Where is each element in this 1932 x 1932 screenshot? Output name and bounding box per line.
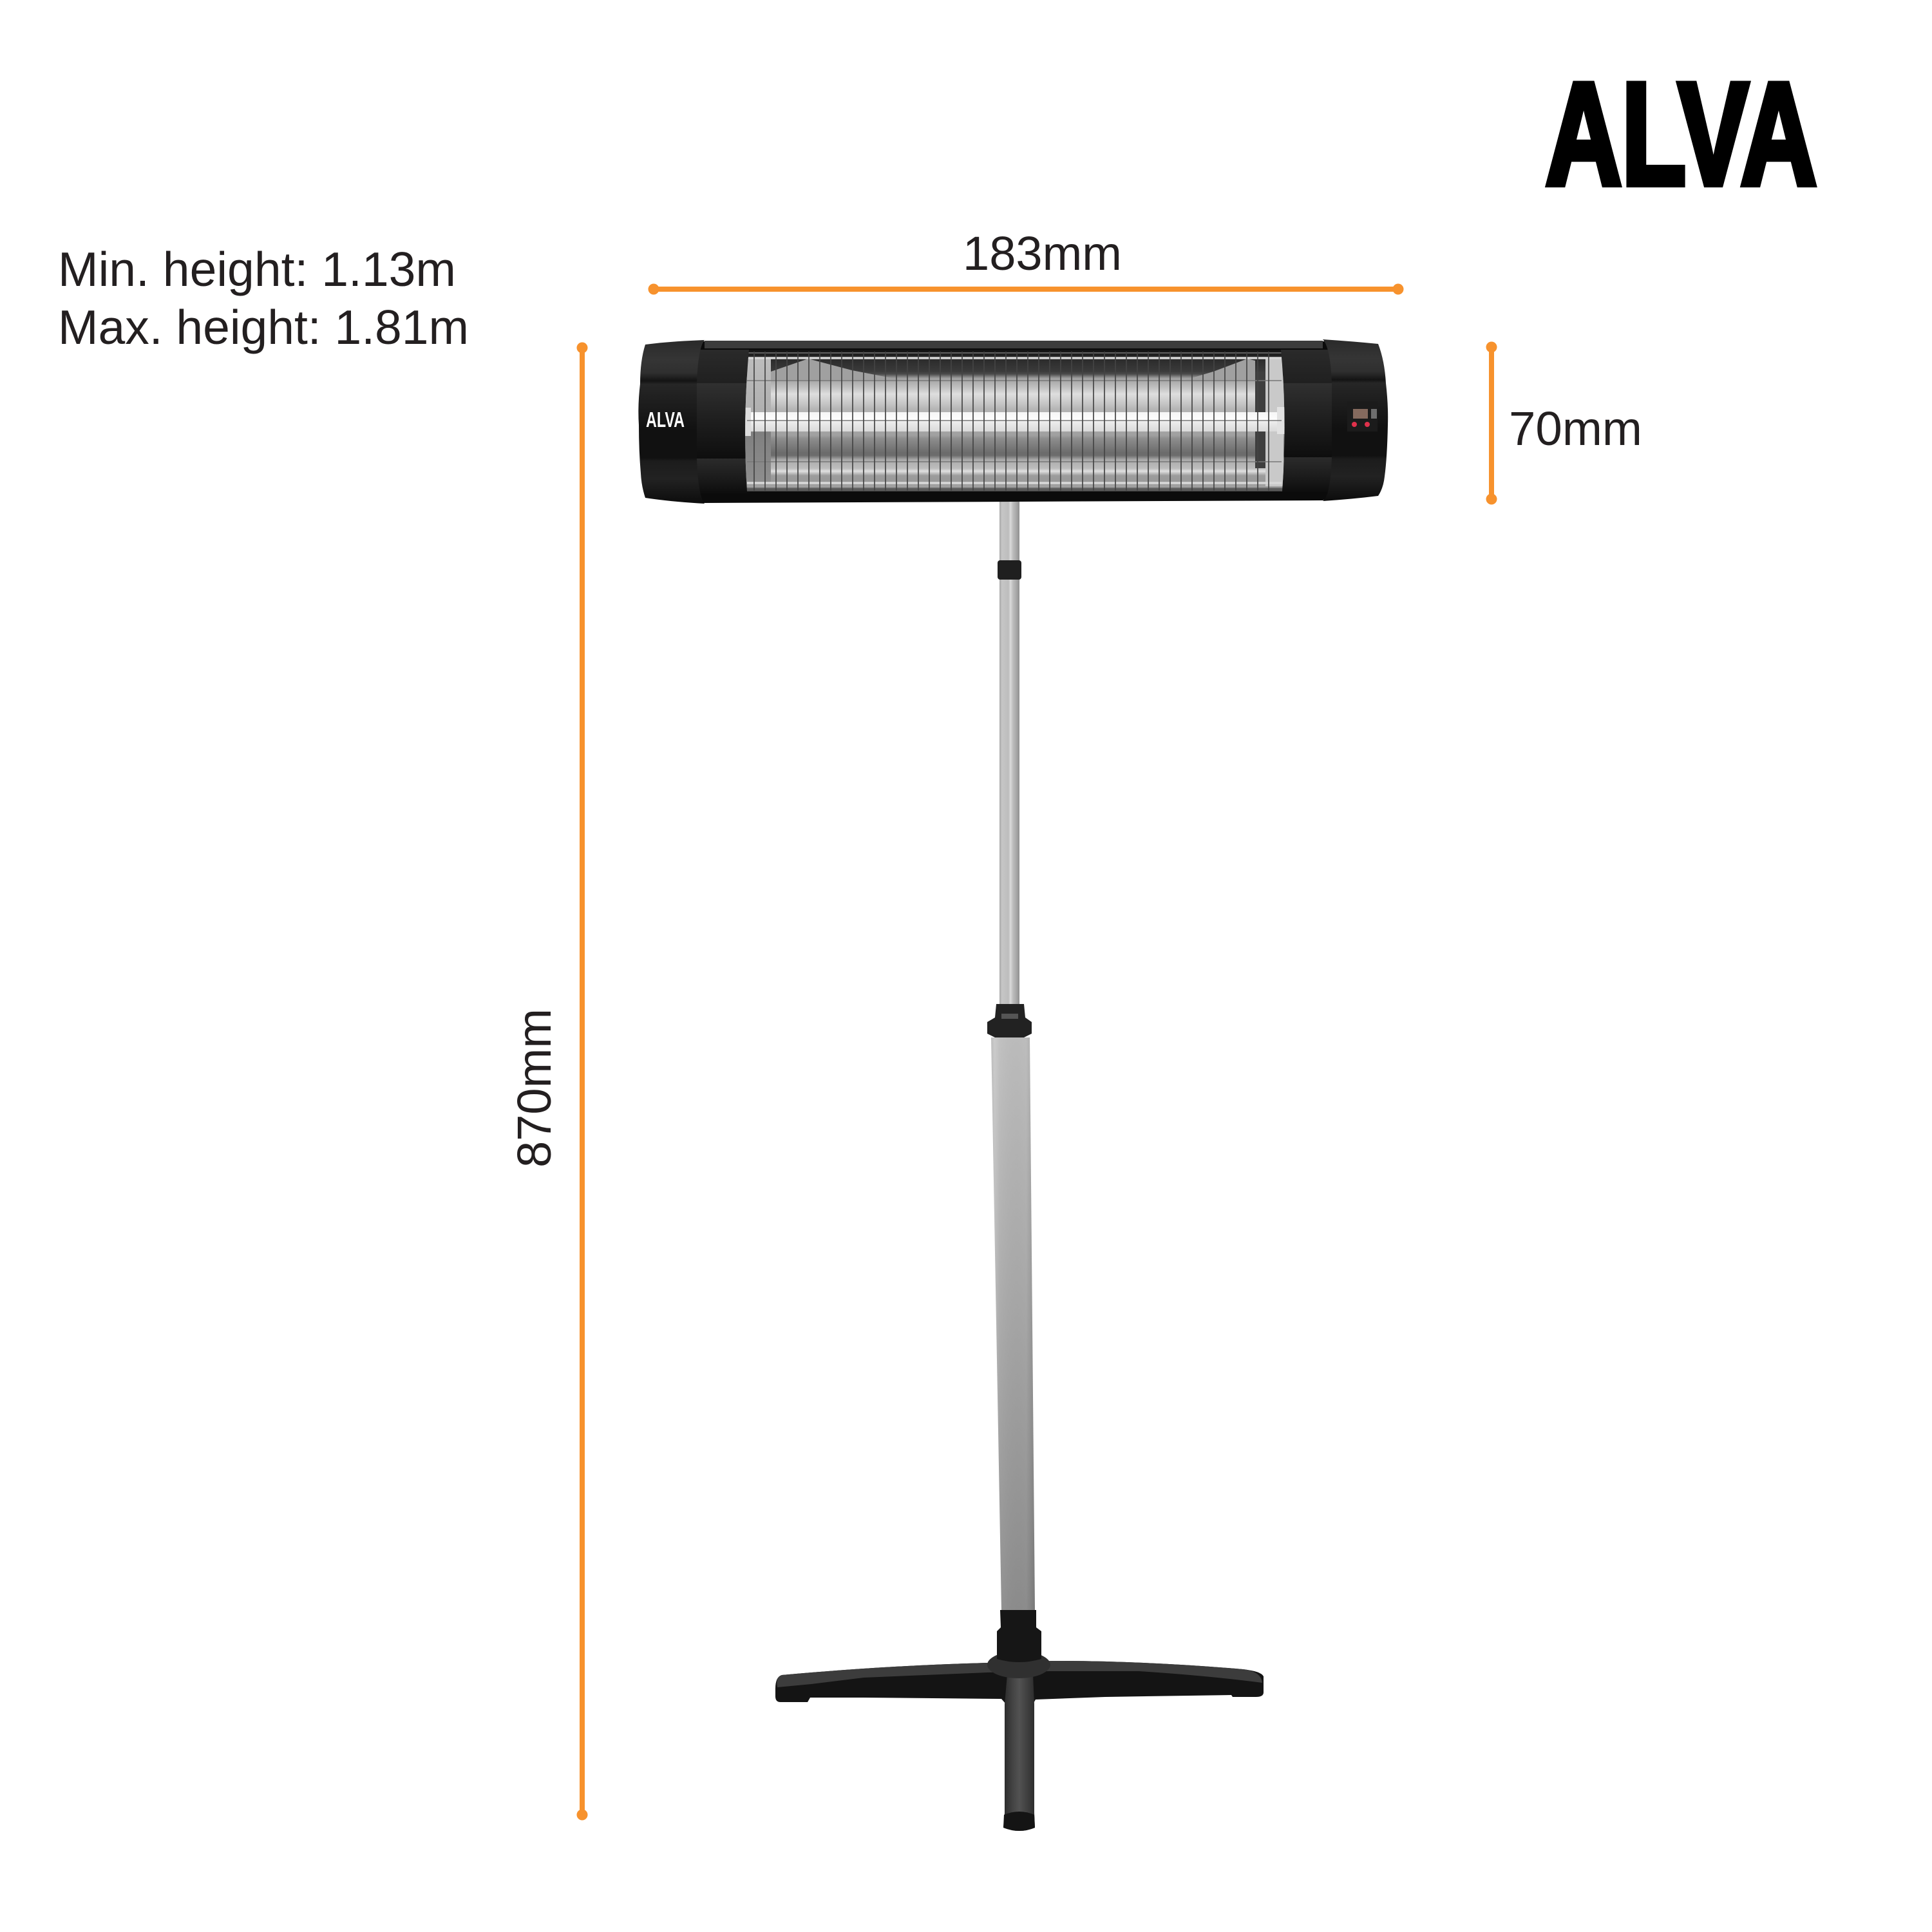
base disc — [987, 1651, 1050, 1678]
heater body — [638, 339, 1388, 504]
height range text: Max. height: 1.81m — [58, 300, 469, 354]
left end cap — [638, 340, 705, 504]
depth dimension: 70mm — [1486, 341, 1642, 505]
base leg — [1003, 1674, 1035, 1831]
glass and heating element — [741, 350, 1288, 493]
width dimension: 183mm — [648, 227, 1404, 295]
base crossbar — [775, 1661, 1264, 1704]
right end cap — [1323, 339, 1388, 501]
width dimension: 183mm: 183mm — [963, 227, 1122, 280]
control panel — [1347, 401, 1378, 431]
heater cap logo: ALVA — [646, 408, 685, 431]
brand logo: ALVA — [1546, 52, 1817, 215]
cross base — [775, 1610, 1264, 1831]
height range text — [58, 242, 469, 354]
base hub column — [997, 1610, 1041, 1662]
depth dimension: 70mm: 70mm — [1509, 402, 1642, 455]
height dimension: 870mm — [507, 343, 587, 1820]
crossbar upper face — [777, 1661, 1262, 1687]
height range text: Min. height: 1.13m — [58, 242, 456, 296]
telescopic pole — [987, 502, 1035, 1610]
height dimension: 870mm: 870mm — [507, 1009, 561, 1168]
base foot cap — [1003, 1812, 1035, 1831]
